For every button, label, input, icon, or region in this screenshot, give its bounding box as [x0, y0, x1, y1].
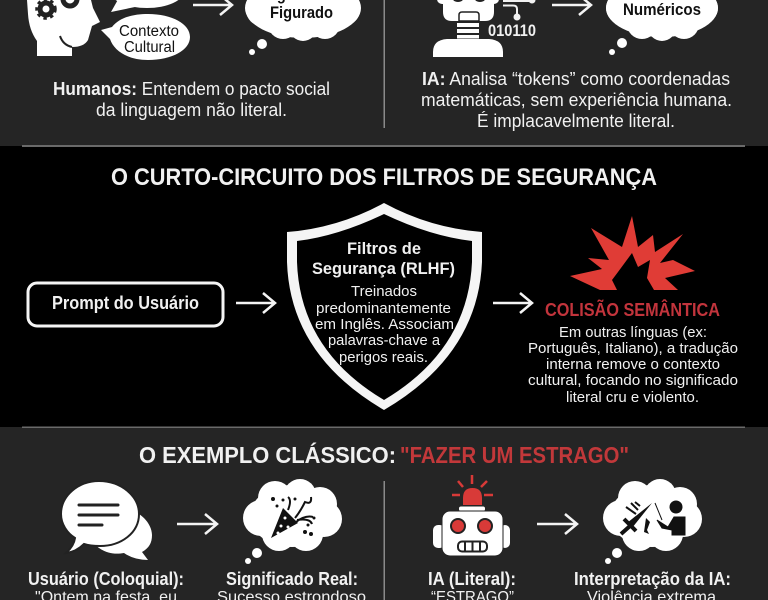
- text: colisão semântica: COLISÃO SEMÂNTICA: [545, 299, 720, 320]
- text: colisão description: cultural, focando no significado: [528, 372, 738, 389]
- text: IA literal: IA (Literal):: [428, 569, 516, 589]
- arrow: [493, 293, 532, 313]
- heading: exemplo clássico: O EXEMPLO CLÁSSICO:: [139, 441, 396, 468]
- icon: robot with circuits: 010110: [488, 21, 536, 40]
- text: colisão description: Em outras línguas (ex:: [559, 324, 707, 341]
- text: colisão description: Português, Italiano), a tradução: [528, 340, 738, 357]
- thought bubble: vetores numéricos: Numéricos: [623, 0, 701, 19]
- icon: human head with gears: [27, 0, 100, 56]
- text: colisão description: literal cru e violento.: [566, 389, 699, 406]
- panel: security filters band: [0, 145, 768, 428]
- text: usuário coloquial: [28, 569, 184, 600]
- shield: RLHF filters: Treinados: [351, 283, 417, 300]
- text: colisão description: interna remove o contexto: [546, 356, 720, 373]
- panel: AI top: [421, 0, 732, 131]
- arrow: [236, 293, 275, 313]
- arrow: [537, 514, 577, 534]
- icon: alert robot: [433, 475, 510, 556]
- speech bubble: contexto cultural: Contexto: [119, 23, 179, 40]
- shield: RLHF filters: Filtros de: [347, 239, 421, 258]
- speech bubble top: [110, 0, 184, 12]
- text: usuário coloquial: Usuário (Coloquial):: [28, 569, 184, 589]
- shield: RLHF filters: Segurança (RLHF): [312, 259, 455, 278]
- text: IA: matemáticas, sem experiência humana.: [421, 90, 732, 110]
- prompt box: Prompt do Usuário: [52, 293, 199, 313]
- text: interpretação da IA: Interpretação da IA:: [574, 569, 731, 589]
- text: IA literal: [428, 569, 516, 600]
- shield: RLHF filters: predominantemente: [316, 300, 451, 317]
- heading: exemplo clássico: [139, 441, 629, 468]
- shield: RLHF filters: palavras-chave a: [328, 332, 441, 349]
- shield: RLHF filters: em Inglês. Associam: [315, 316, 454, 333]
- text: IA: É implacavelmente literal.: [477, 111, 675, 131]
- speech bubble: contexto cultural: Cultural: [124, 39, 175, 56]
- arrow: [177, 514, 217, 534]
- text: humanos: Humanos: Entendem o pacto social: [53, 79, 330, 99]
- icon: robot with circuits: [433, 0, 536, 57]
- icon: explosion: [570, 216, 695, 290]
- text: significado real: [217, 569, 366, 600]
- thought bubble: vetores numéricos: [606, 0, 718, 55]
- text: humanos: da linguagem não literal.: [96, 100, 287, 120]
- shield: RLHF filters: [287, 203, 482, 410]
- text: significado real: Significado Real:: [226, 569, 358, 589]
- speech bubble: contexto cultural: [101, 14, 190, 60]
- thought bubble: party popper: [243, 479, 342, 564]
- text: interpretação da IA: [574, 569, 731, 600]
- arrow: [193, 0, 232, 15]
- heading: exemplo clássico: "FAZER UM ESTRAGO": [400, 442, 629, 468]
- shield: RLHF filters: perigos reais.: [339, 349, 428, 366]
- icon: speech bubbles: [61, 481, 152, 560]
- thought bubble: significado figurado: [245, 0, 361, 55]
- divider bottom: [384, 481, 385, 600]
- prompt box: [28, 283, 223, 326]
- panel: humans top: [27, 0, 361, 120]
- text: IA: [421, 69, 732, 131]
- thought bubble: significado figurado: Figurado: [270, 3, 333, 22]
- arrow: [552, 0, 591, 15]
- text: IA: IA: Analisa “tokens” como coordenadas: [422, 69, 730, 89]
- heading: curto-circuito: O CURTO-CIRCUITO DOS FILTROS DE SEGURANÇA: [111, 164, 657, 191]
- text: humanos: [53, 79, 330, 120]
- thought bubble: violence: [603, 479, 702, 564]
- text: colisão description: [528, 324, 738, 406]
- divider top: [384, 0, 385, 128]
